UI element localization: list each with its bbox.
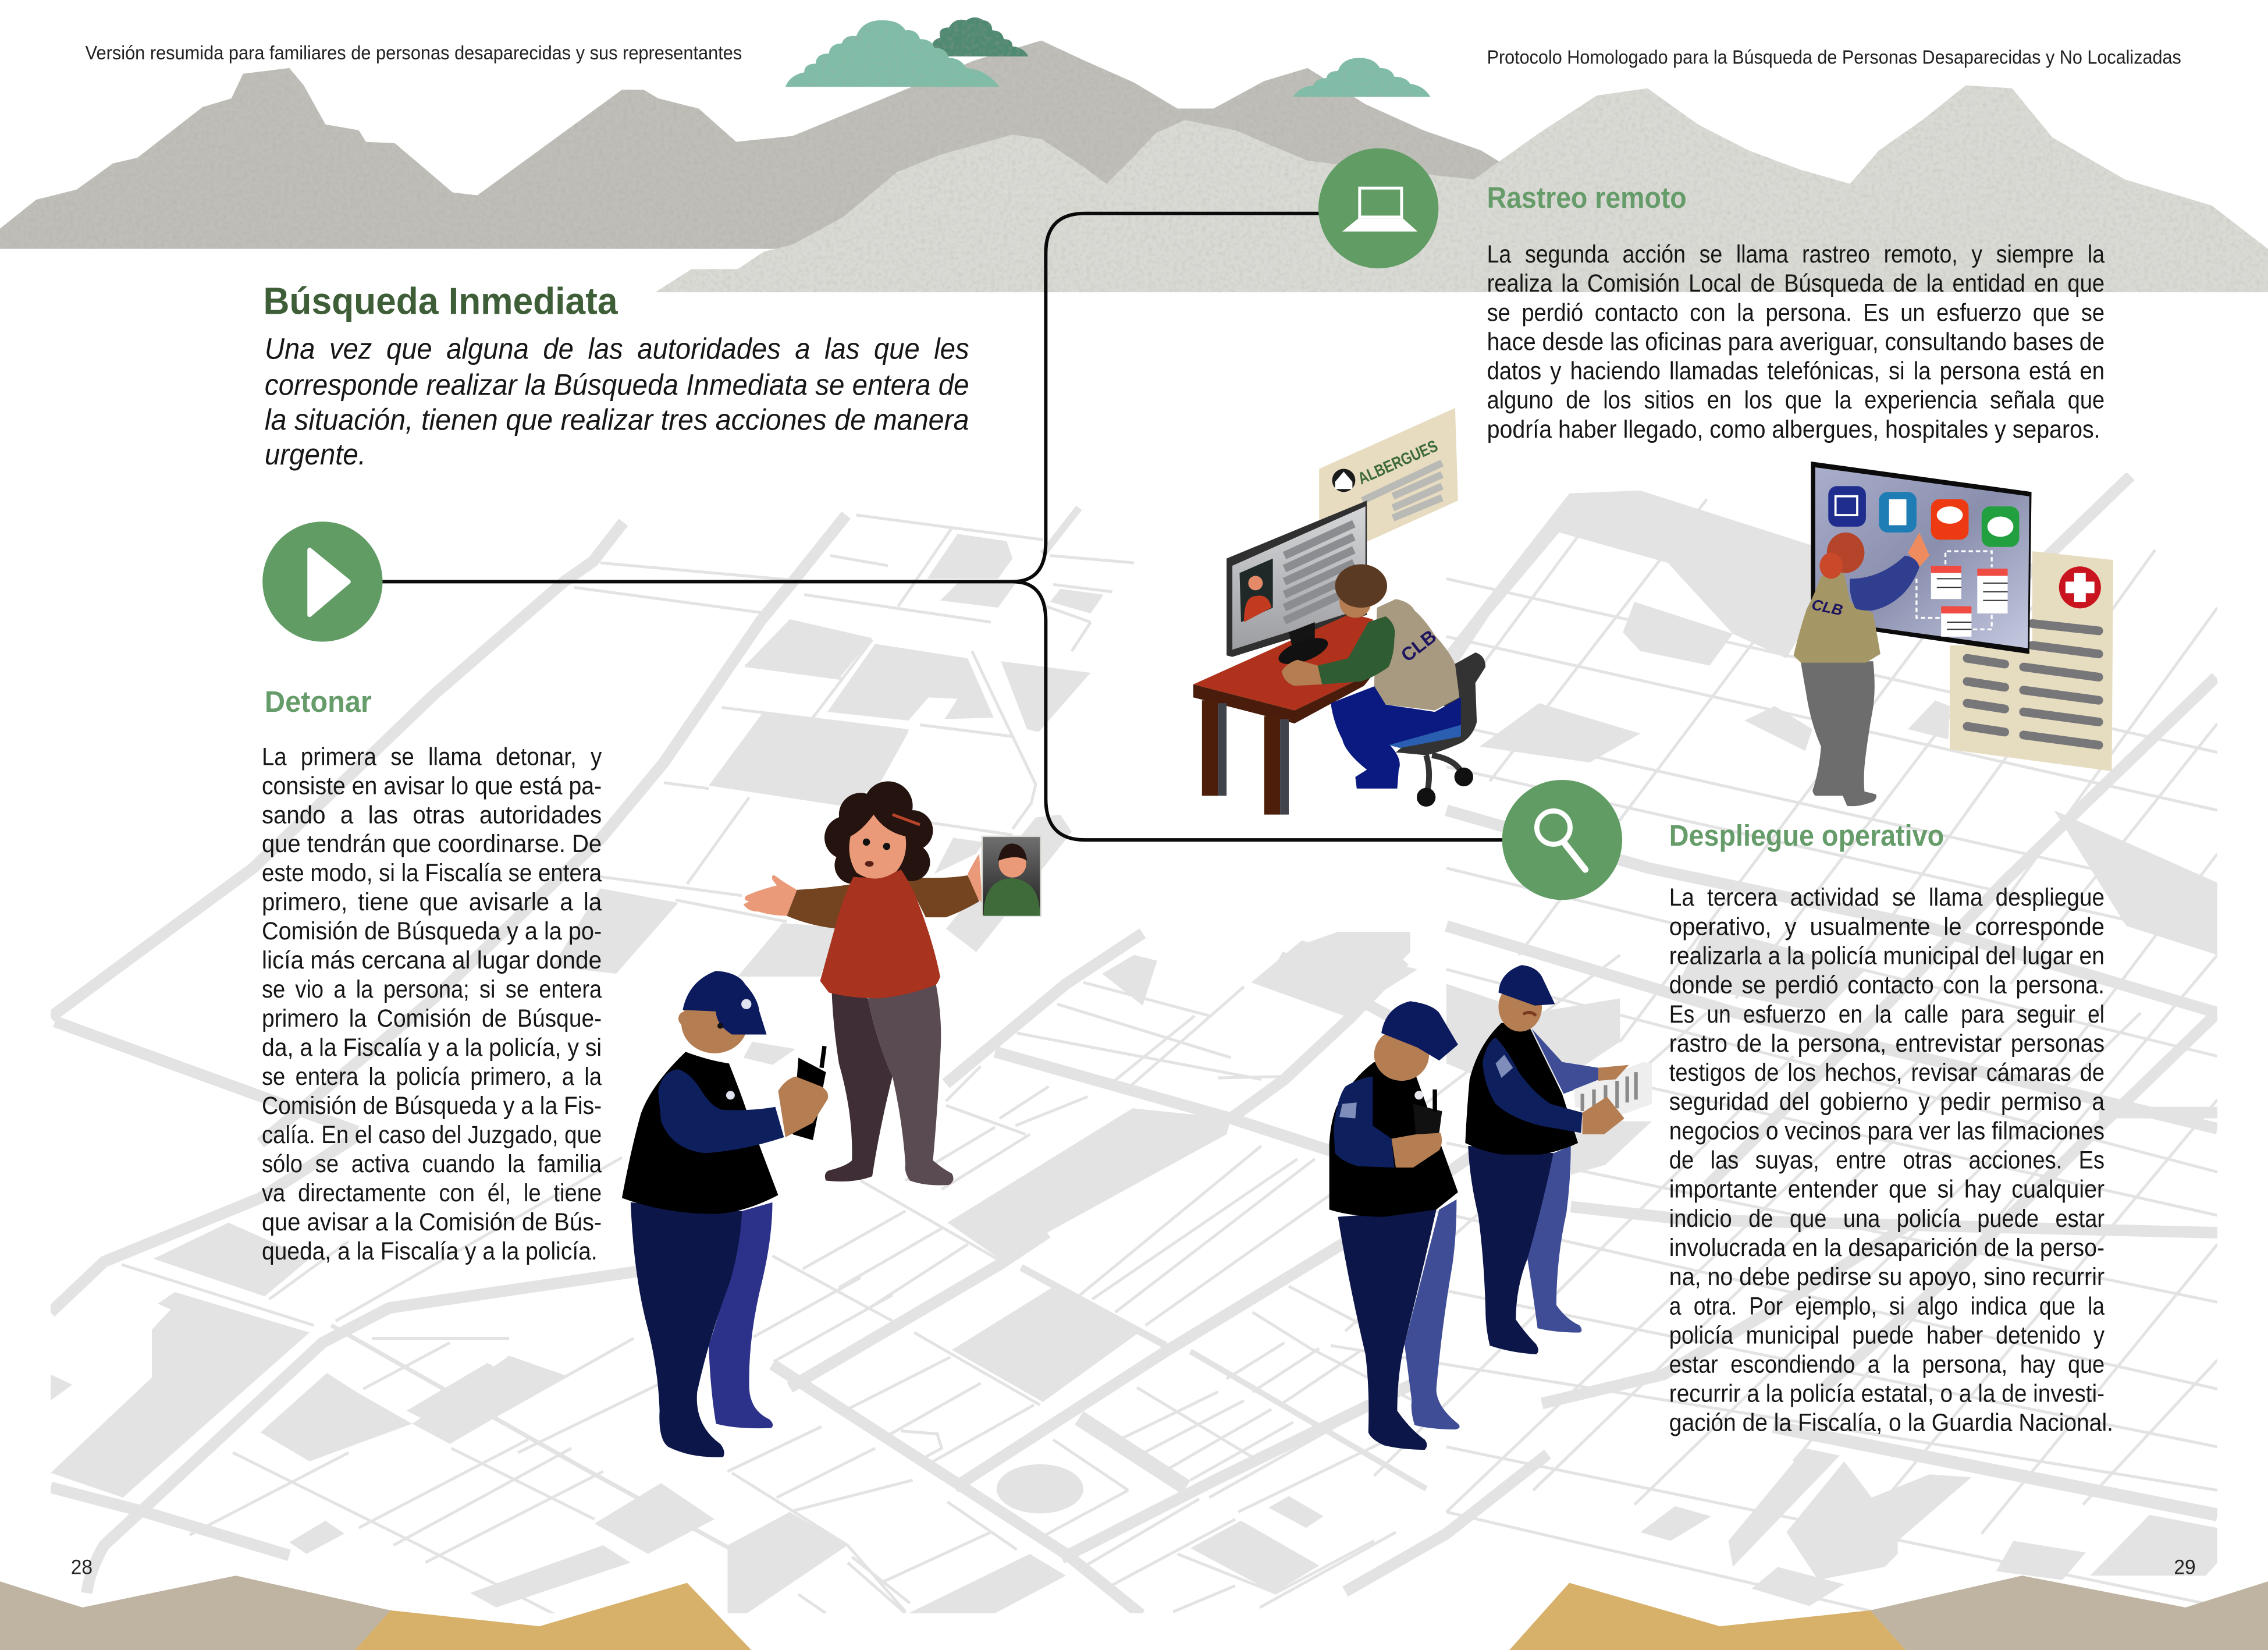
text: Detonar: [262, 743, 602, 1265]
icon: search circle: [1502, 780, 1622, 900]
albergues sign: ALBERGUES: [1355, 437, 1441, 488]
text: Despliegue operativo: testigos de los hechos, revisar cámaras de: [1669, 1059, 2105, 1086]
photo of missing person: [982, 836, 1041, 916]
intro text: corresponde realizar la Búsqueda Inmediata se entera de: [265, 368, 969, 402]
text: Detonar: que avisar a la Comisión de Bús-: [262, 1208, 602, 1236]
light mountain range: [655, 86, 2268, 292]
page number 28: 28: [71, 1556, 93, 1579]
heading: Despliegue operativo: Despliegue operativo: [1669, 819, 1944, 852]
heading: Detonar: Detonar: [265, 685, 372, 718]
text: Despliegue operativo: negocios o vecinos para ver las filmaciones: [1669, 1117, 2105, 1144]
hospital document: [1950, 551, 2113, 771]
text: Rastreo remoto: se perdió contacto con la persona. Es un esfuerzo que se: [1487, 299, 2105, 326]
text: Despliegue operativo: [1669, 883, 2113, 1436]
text: Rastreo remoto: hace desde las oficinas para averiguar, consultando bases de: [1487, 328, 2105, 355]
text: Despliegue operativo: realizarla a la policía municipal del lugar en: [1669, 942, 2105, 969]
text: Rastreo remoto: La segunda acción se llama rastreo remoto, y siempre la: [1487, 240, 2105, 268]
text: Despliegue operativo: policía municipal puede haber detenido y: [1669, 1321, 2105, 1349]
text: Detonar: La primera se llama detonar, y: [262, 743, 602, 770]
text: Detonar: se vio a la persona; si se entera: [262, 975, 602, 1003]
illustration: CLB worker at desk: CLB: [1397, 626, 1440, 666]
text: Rastreo remoto: alguno de los sitios en los que la experiencia señala que: [1487, 386, 2105, 414]
header right: Protocolo Homologado para la Búsqueda de Personas Desaparecidas y No Localizadas: [1487, 47, 2181, 68]
icon: laptop circle: [1318, 148, 1438, 268]
text: Rastreo remoto: realiza la Comisión Local de Búsqueda de la entidad en que: [1487, 269, 2105, 297]
heading: Rastreo remoto: Rastreo remoto: [1487, 181, 1687, 214]
illustration: police with radio: [622, 971, 828, 1457]
text: Detonar: primero la Comisión de Búsque-: [262, 1005, 602, 1032]
text: Despliegue operativo: rastro de la persona, entrevistar personas: [1669, 1030, 2105, 1057]
touch screen: [1811, 462, 2032, 654]
illustration: CLB worker at desk: [1193, 408, 1485, 815]
text: Despliegue operativo: gación de la Fiscalía, o la Guardia Nacional.: [1669, 1409, 2113, 1436]
intro text: [265, 332, 969, 471]
text: Despliegue operativo: recurrir a la policía estatal, o a la de investi-: [1669, 1380, 2105, 1407]
officer with radio: [1329, 1001, 1460, 1450]
intro text: Una vez que alguna de las autoridades a las que les: [265, 332, 969, 366]
intro text: urgente.: [265, 438, 366, 471]
intro text: la situación, tienen que realizar tres acciones de manera: [265, 403, 969, 436]
text: Despliegue operativo: na, no debe pedirse su apoyo, sino recurrir: [1669, 1263, 2105, 1290]
illustration: CLB worker at screen with hospital list: CLB: [1810, 595, 1844, 619]
text: Despliegue operativo: donde se perdió contacto con la persona.: [1669, 971, 2105, 999]
text: Despliegue operativo: involucrada en la desaparición de la perso-: [1669, 1234, 2105, 1261]
text: Detonar: licía más cercana al lugar donde: [262, 946, 602, 974]
text: Detonar: primero, tiene que avisarle a la: [262, 888, 602, 916]
illustration: CLB worker at screen with hospital list: [1794, 462, 2113, 806]
header left: Versión resumida para familiares de personas desaparecidas y sus representantes: [86, 42, 742, 64]
text: Detonar: calía. En el caso del Juzgado, que: [262, 1121, 602, 1148]
text: Detonar: que tendrán que coordinarse. De: [262, 830, 602, 857]
text: Detonar: va directamente con él, le tiene: [262, 1179, 602, 1207]
text: Rastreo remoto: [1487, 240, 2105, 443]
text: Despliegue operativo: La tercera actividad se llama despliegue: [1669, 883, 2105, 911]
text: Detonar: consiste en avisar lo que está pa-: [262, 772, 602, 799]
text: Detonar: Comisión de Búsqueda y a la po-: [262, 917, 602, 945]
title: Búsqueda Inmediata: [263, 279, 618, 322]
text: Despliegue operativo: a otra. Por ejemplo, si algo indica que la: [1669, 1292, 2105, 1319]
text: Rastreo remoto: podría haber llegado, como albergues, hospitales y separos.: [1487, 416, 2100, 443]
text: Despliegue operativo: importante entender que si hay cualquier: [1669, 1176, 2105, 1203]
background street map: [51, 476, 2217, 1616]
text: Despliegue operativo: estar escondiendo a la persona, hay que: [1669, 1350, 2105, 1378]
text: Detonar: se entera la policía primero, a la: [262, 1063, 602, 1090]
text: Detonar: este modo, si la Fiscalía se entera: [262, 859, 602, 886]
illustration: police officers with radio and tablet: [1329, 965, 1652, 1450]
mountains: top range: [0, 41, 2268, 292]
text: Detonar: sólo se activa cuando la familia: [262, 1150, 602, 1177]
office chair: [1396, 652, 1485, 807]
icon: play circle: [262, 521, 383, 642]
dark mountain range: [0, 41, 1519, 249]
text: Detonar: sando a las otras autoridades: [262, 801, 602, 828]
bottom mountains: [0, 1576, 2268, 1650]
connector lines: [382, 214, 1507, 840]
text: Despliegue operativo: seguridad del gobierno y pedir permiso a: [1669, 1088, 2105, 1115]
page number 29: 29: [2174, 1556, 2196, 1579]
text: Despliegue operativo: indicio de que una policía puede estar: [1669, 1205, 2105, 1232]
text: Despliegue operativo: operativo, y usualmente le corresponde: [1669, 913, 2105, 940]
clouds: [785, 17, 1431, 97]
text: Detonar: da, a la Fiscalía y a la policía, y si: [262, 1034, 602, 1061]
text: Despliegue operativo: Es un esfuerzo en la calle para seguir el: [1669, 1000, 2105, 1028]
albergues sign: [1319, 408, 1458, 541]
text: Rastreo remoto: datos y haciendo llamadas telefónicas, si la persona está en: [1487, 357, 2105, 385]
text: Despliegue operativo: de las suyas, entre otras acciones. Es: [1669, 1146, 2105, 1173]
text: Detonar: Comisión de Búsqueda y a la Fis-: [262, 1092, 602, 1119]
text: Detonar: queda, a la Fiscalía y a la policía.: [262, 1237, 598, 1265]
illustration: woman with photo: [744, 781, 1041, 1186]
officer with tablet: [1465, 965, 1652, 1354]
